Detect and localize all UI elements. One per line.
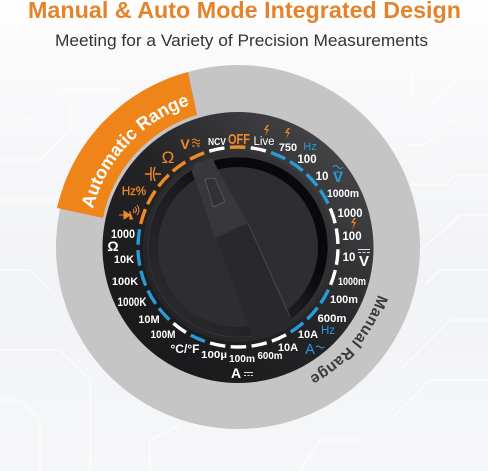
dial labels: white: 100 <box>342 231 362 243</box>
dial labels: white: 1000m <box>338 276 366 288</box>
dial labels: orange: Ω <box>162 148 174 167</box>
panel: gray outer disc <box>56 65 420 429</box>
dial labels: white: 750 <box>279 142 297 154</box>
dial labels: blue: V <box>333 169 343 186</box>
dial labels: blue: Hz <box>303 141 317 153</box>
dial labels: blue: A <box>305 342 315 358</box>
dial labels: white: 10 <box>316 171 328 183</box>
dial labels: blue: Hz <box>321 325 335 337</box>
dial labels: white: V <box>359 253 369 270</box>
dial labels: white: 10M <box>138 314 160 326</box>
dial labels: white: 100µ <box>201 349 227 361</box>
subtitle: Meeting for a Variety of Precision Measurements <box>55 31 428 50</box>
label: automatic range: Automatic Range <box>82 97 188 209</box>
dial labels: white: Live <box>253 136 275 148</box>
dial labels: white: 1000 <box>111 227 135 241</box>
panel: automatic range sector <box>57 72 197 218</box>
dial labels: white: 10K <box>114 254 134 266</box>
dial tick marks <box>97 106 379 388</box>
dial labels: orange: OFF <box>228 131 250 148</box>
dial labels: white: Ω <box>107 238 119 254</box>
dial labels: white: 600m <box>318 313 347 325</box>
panel: knob base <box>143 152 333 342</box>
dial labels: white: 1000K <box>118 297 147 309</box>
dial labels: blue <box>303 141 343 358</box>
label: manual range: Manual Range <box>311 296 388 382</box>
dial labels: orange: Hz% <box>122 186 146 198</box>
dial labels: white: NCV <box>208 137 226 148</box>
dial labels: white: 10 <box>343 252 355 264</box>
dial labels: white: 100 <box>297 154 317 166</box>
dial labels: white: 1000 <box>338 206 363 220</box>
handle indicator window <box>205 178 225 207</box>
dial labels: white: 10A <box>278 342 298 354</box>
dial labels: white <box>107 136 370 381</box>
dial labels: white: 100m <box>330 294 358 306</box>
knob handle <box>192 158 290 337</box>
dial labels: white: °C/°F <box>170 342 200 356</box>
dial labels: white: 100K <box>112 276 138 288</box>
dial labels: white: 100m <box>229 353 255 365</box>
dial labels: orange <box>119 125 356 230</box>
dial labels: white: 10A <box>298 329 318 341</box>
panel: black dial <box>102 112 374 383</box>
dial labels: white: 100M <box>150 329 176 341</box>
dial labels: orange: V <box>180 136 190 152</box>
dial labels: white: 1000m <box>327 188 359 200</box>
dial labels: white: A <box>231 365 241 381</box>
dial labels: white: 600m <box>258 350 282 362</box>
